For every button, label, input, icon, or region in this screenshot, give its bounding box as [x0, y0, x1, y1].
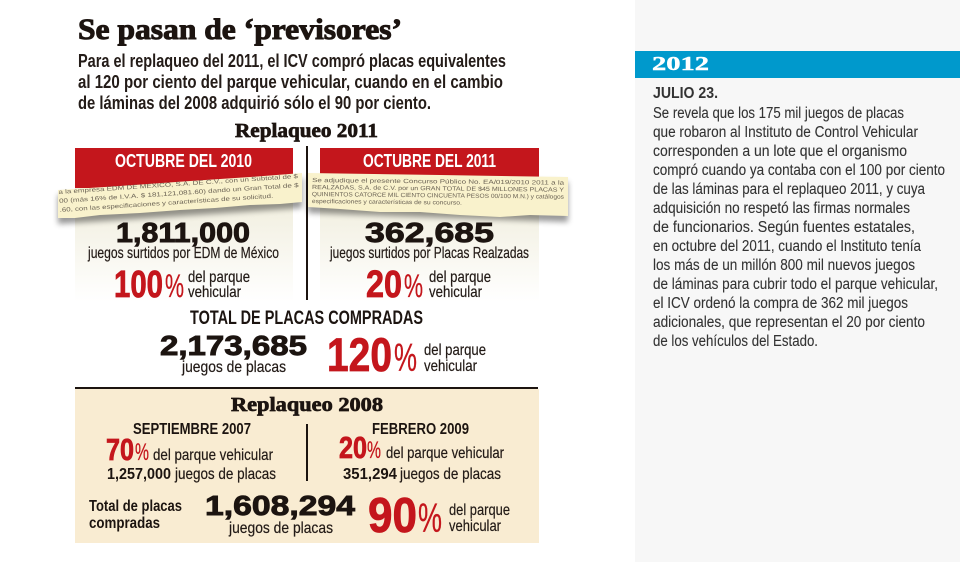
text block: julio 23 chronology: el ICV ordenó la compra de 362 mil juegos	[653, 295, 908, 312]
clipping: EDM de México document: 00 (más 16% de I.V.A. $ 181,121,081.60) dando un Gran Total de $	[59, 183, 300, 205]
divider: replaqueo 2008	[306, 424, 308, 481]
divider: replaqueo 2011	[306, 146, 308, 300]
column: febrero 2009: juegos de placas	[399, 466, 501, 483]
clipping: Placas Realzadas document: especificaciones y características de su concurso.	[312, 199, 462, 207]
label: total de placas compradas: compradas	[89, 515, 160, 532]
text block: julio 23 chronology: Se revela que los 175 mil juegos de placas	[653, 105, 904, 122]
stat: 90% del parque vehicular: 90	[368, 489, 417, 543]
text block: julio 23 chronology: de los vehículos del Estado.	[653, 333, 818, 350]
stat: 100% del parque vehicular: del parque	[188, 269, 250, 286]
stat: 1,811,000 juegos	[87, 217, 279, 262]
stat: 20% del parque vehicular: vehicular	[429, 284, 483, 301]
text block: julio 23 chronology: corresponden a un lote que el organismo	[653, 143, 907, 160]
clipping: Placas Realzadas document: Se adjudique el presente Concurso Público No. EA/019/2010 2011 a la	[312, 178, 565, 187]
stat: 100% del parque vehicular: vehicular	[188, 284, 242, 301]
panel: replaqueo 2008	[75, 387, 539, 543]
column: septiembre 2007: del parque vehicular	[153, 447, 274, 464]
banner: 2012	[635, 51, 960, 78]
stat: 20% del parque vehicular: %	[404, 268, 423, 304]
stat: 362,685 juegos: 362,685	[365, 217, 494, 248]
column: septiembre 2007: 70	[106, 432, 134, 467]
stat: 2,173,685 juegos de placas	[160, 330, 307, 376]
stat: 1,608,294 juegos de placas: juegos de placas	[228, 520, 333, 537]
heading: replaqueo 2008: Replaqueo 2008	[231, 394, 383, 416]
stat: 90% del parque vehicular: %	[418, 495, 442, 541]
clipping: Placas Realzadas document: REALZADAS, S.A. de C.V. por un GRAN TOTAL DE $45 MILLONES PLACAS Y	[312, 185, 564, 194]
clipping: EDM de México document	[58, 173, 302, 224]
heading: octubre del 2010: OCTUBRE DEL 2010	[115, 151, 252, 171]
column: febrero 2009: 351,294	[343, 466, 397, 483]
column: septiembre 2007	[106, 421, 276, 483]
stat: 1,608,294 juegos de placas: 1,608,294	[205, 490, 355, 521]
clipping: Placas Realzadas document	[308, 173, 568, 222]
stat: 1,811,000 juegos: juegos surtidos por EDM de México	[87, 245, 279, 262]
text block: julio 23 chronology: adquisición no respetó las firmas normales	[653, 200, 910, 217]
stat: 100% del parque vehicular: %	[165, 268, 184, 304]
stat: 100% del parque vehicular: 100	[114, 264, 163, 306]
stat: 362,685 juegos	[329, 217, 529, 262]
stat: 120% del parque vehicular: %	[394, 337, 417, 380]
stat: 120% del parque vehicular: del parque	[424, 342, 486, 359]
clipping: EDM de México document: .60, con las especificaciones y características de su solicitud.	[60, 194, 274, 214]
text block: intro	[78, 51, 506, 113]
column: febrero 2009: 20	[339, 430, 367, 465]
heading: octubre del 2011: OCTUBRE DEL 2011	[363, 151, 496, 171]
stat: 20% del parque vehicular: 20	[366, 264, 402, 306]
column: septiembre 2007: SEPTIEMBRE 2007	[133, 421, 251, 438]
stat: 90% del parque vehicular	[368, 489, 510, 543]
text block: julio 23 chronology	[653, 85, 945, 350]
heading: Se pasan de previsores: Se pasan de ‘previsores’	[78, 13, 402, 46]
heading: Replaqueo 2011: Replaqueo 2011	[235, 120, 378, 142]
panel: octubre del 2010	[75, 148, 293, 302]
stat: 2,173,685 juegos de placas: 2,173,685	[160, 330, 307, 361]
stat: 1,608,294 juegos de placas	[205, 490, 355, 537]
column: septiembre 2007: 1,257,000	[107, 466, 171, 483]
stat: 20% del parque vehicular	[366, 264, 491, 306]
column: septiembre 2007: %	[135, 439, 149, 466]
label: total de placas compradas	[89, 498, 182, 532]
column: febrero 2009: %	[367, 437, 381, 464]
stat: 120% del parque vehicular: vehicular	[424, 358, 478, 375]
text block: julio 23 chronology: de las láminas para el replaqueo 2011, y cuya	[653, 181, 925, 198]
stat: 90% del parque vehicular: vehicular	[449, 518, 502, 535]
stat: 2,173,685 juegos de placas: juegos de placas	[181, 359, 286, 376]
text block: julio 23 chronology: en octubre del 2011, cuando el Instituto tenía	[653, 238, 921, 255]
text block: intro: Para el replaqueo del 2011, el ICV compró placas equivalentes	[78, 51, 506, 71]
panel: right sidebar background	[635, 0, 960, 562]
label: total de placas compradas: Total de placas	[89, 498, 182, 515]
stat: 120% del parque vehicular	[327, 328, 486, 381]
stat: 100% del parque vehicular	[114, 264, 250, 306]
stat: 362,685 juegos: juegos surtidos por Placas Realzadas	[329, 245, 529, 262]
stat: 90% del parque vehicular: del parque	[449, 502, 510, 519]
stat: 120% del parque vehicular: 120	[327, 328, 392, 381]
text block: julio 23 chronology: los más de un millón 800 mil nuevos juegos	[653, 257, 915, 274]
text block: intro: de láminas del 2008 adquirió sólo el 90 por ciento.	[78, 93, 431, 113]
text block: julio 23 chronology: que robaron al Instituto de Control Vehicular	[653, 124, 918, 141]
text block: intro: al 120 por ciento del parque vehicular, cuando en el cambio	[78, 72, 503, 92]
column: febrero 2009: FEBRERO 2009	[372, 421, 469, 438]
column: febrero 2009: del parque vehicular	[386, 445, 505, 462]
clipping: Placas Realzadas document: QUINIENTOS CATORCE MIL CIENTO CINCUENTA PESOS 00/100 M.N.) y catálogos	[312, 192, 564, 201]
banner: 2012: 2012	[652, 53, 709, 75]
column: septiembre 2007: juegos de placas	[174, 466, 276, 483]
stat: 1,811,000 juegos: 1,811,000	[116, 217, 250, 248]
stat: 20% del parque vehicular: del parque	[429, 269, 491, 286]
text block: julio 23 chronology: adicionales, que representan el 20 por ciento	[653, 314, 925, 331]
heading: total de placas compradas: TOTAL DE PLACAS COMPRADAS	[190, 308, 423, 329]
panel: octubre del 2011	[320, 148, 539, 302]
column: febrero 2009	[339, 421, 505, 483]
clipping: EDM de México document: a la empresa EDM DE MEXICO, S.A. DE C.V., con un Subtotal de $	[58, 174, 299, 196]
text block: julio 23 chronology: JULIO 23.	[653, 85, 718, 102]
text block: julio 23 chronology: de funcionarios. Según fuentes estatales,	[653, 219, 915, 236]
